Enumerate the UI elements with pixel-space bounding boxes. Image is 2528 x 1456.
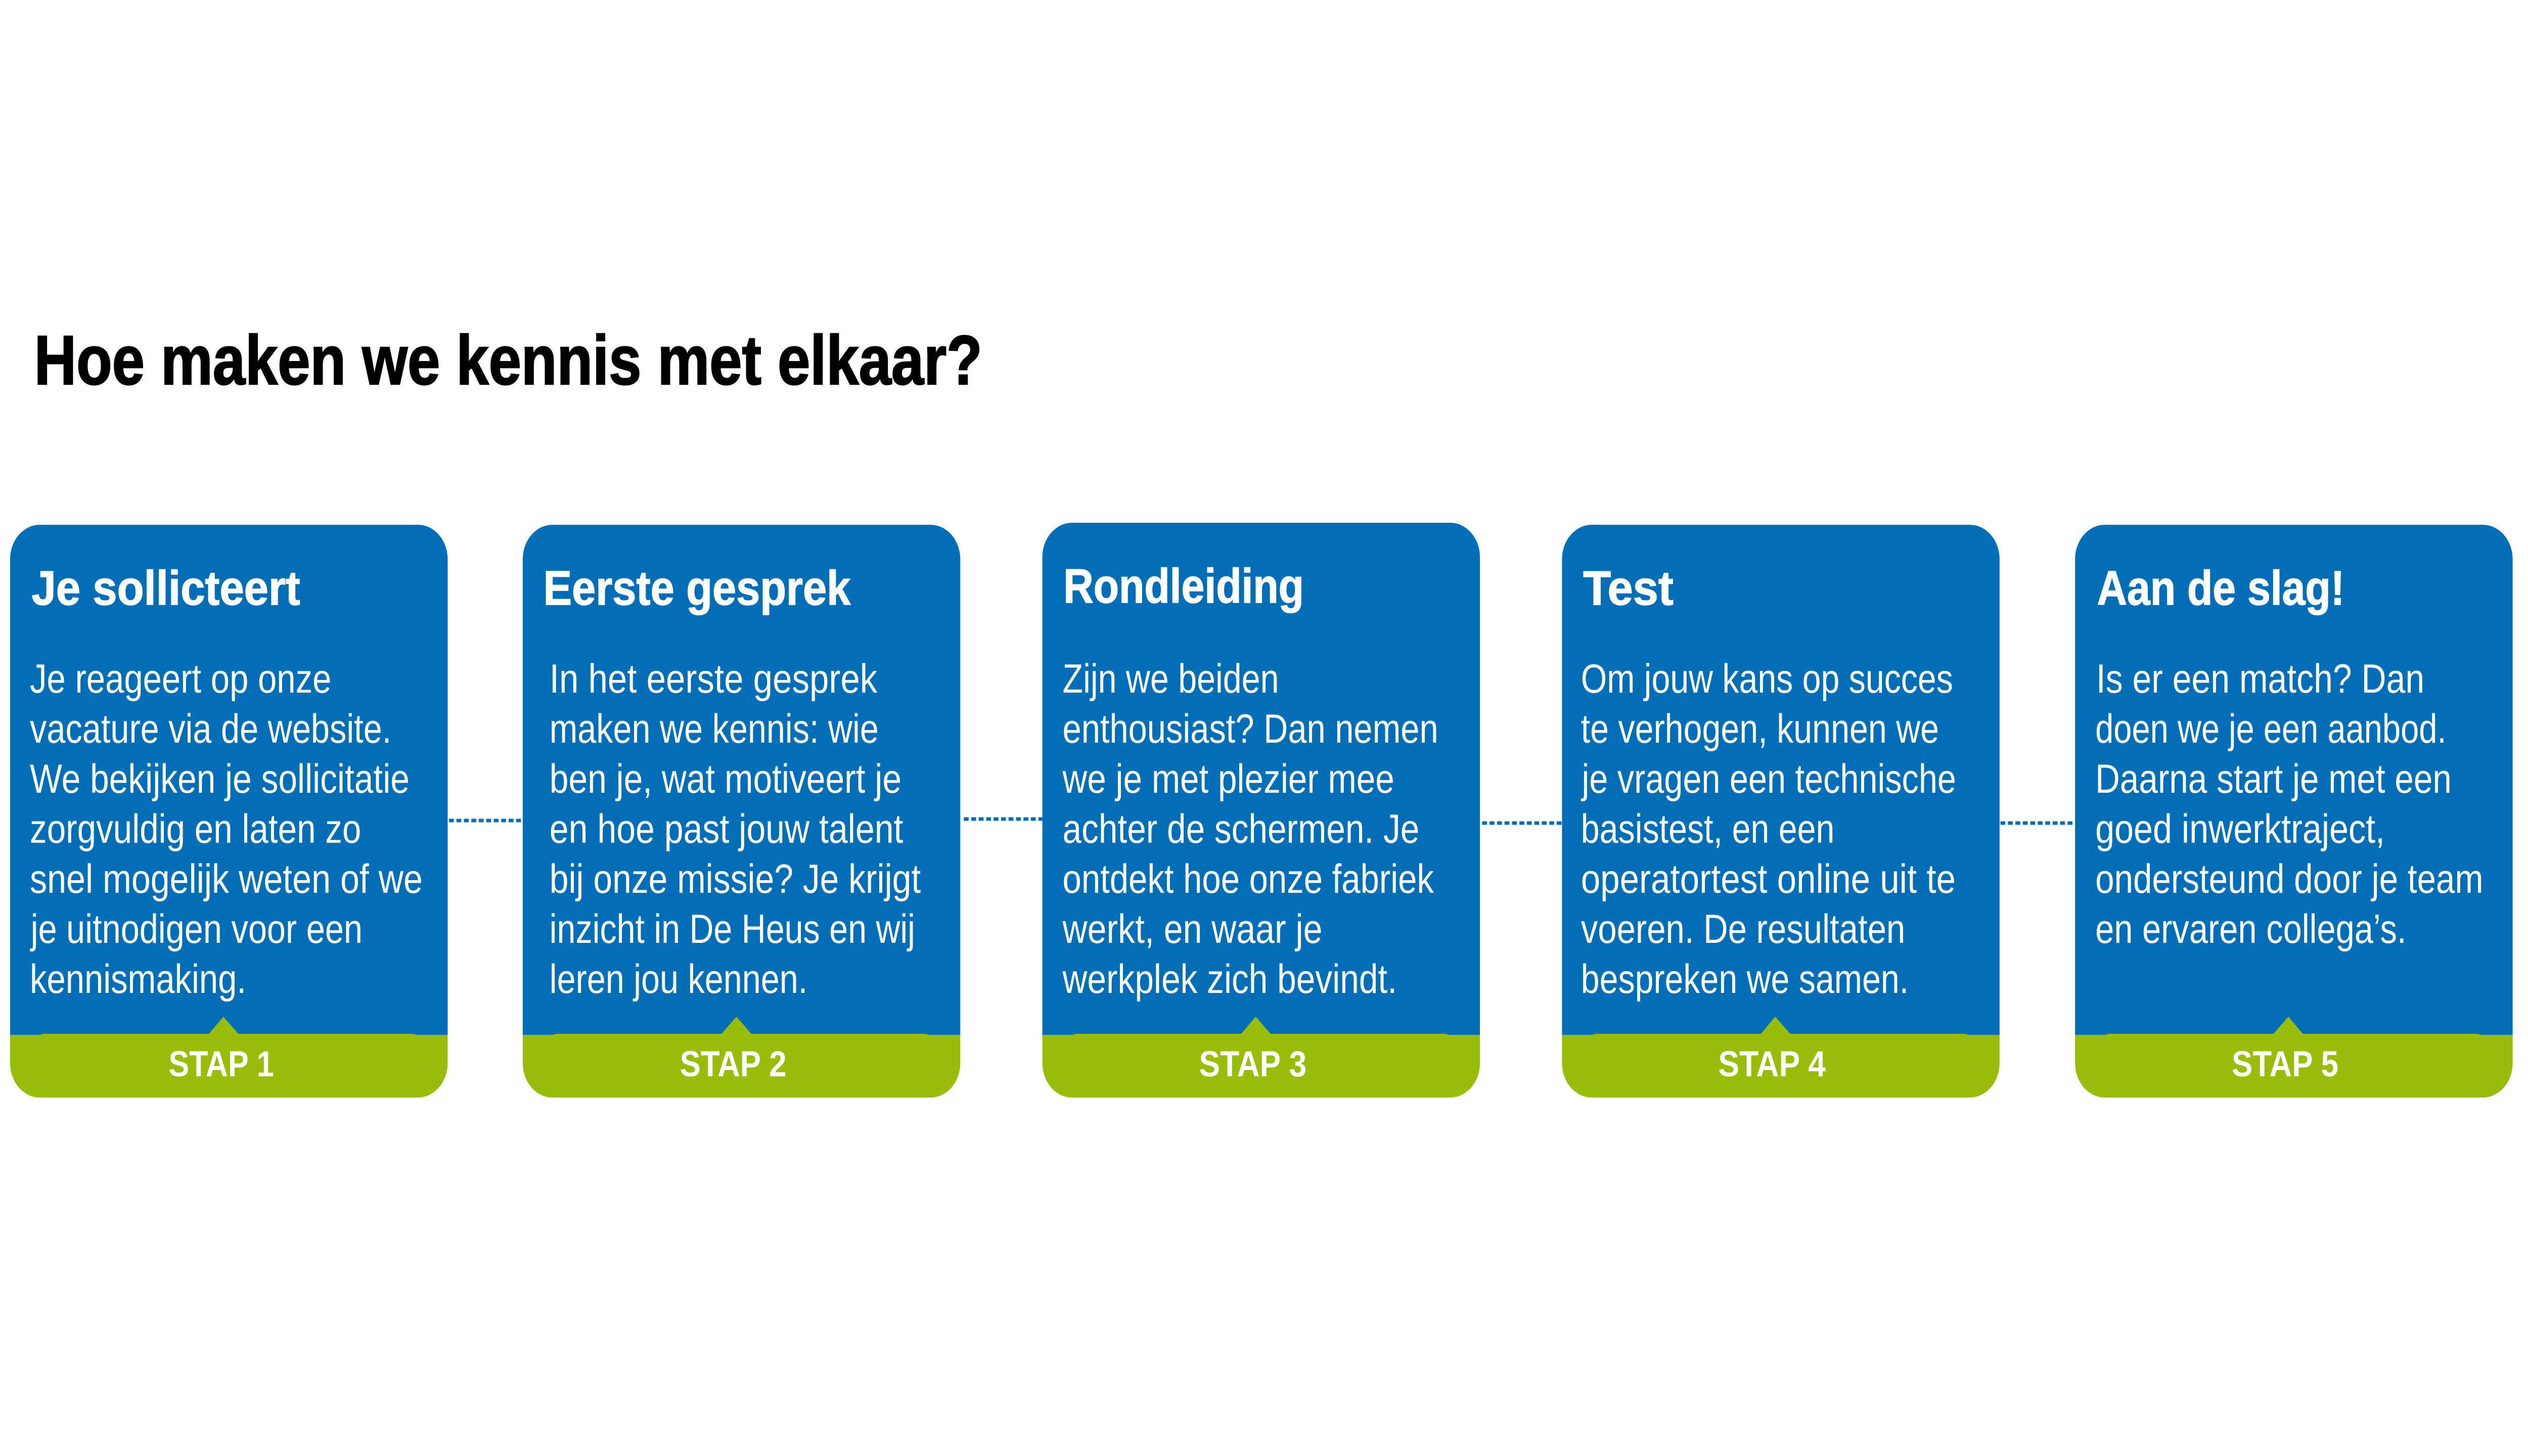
connector: step 2 to step 3	[964, 817, 1043, 821]
step label: STAP 5	[2232, 1044, 2338, 1084]
body text: voeren. De resultaten	[1581, 906, 1905, 952]
body text: vacature via de website.	[30, 706, 391, 752]
title: Hoe maken we kennis met elkaar?	[34, 322, 982, 399]
step label: STAP 4	[1718, 1044, 1826, 1084]
step label: STAP 3	[1199, 1044, 1306, 1084]
body text: en ervaren collega’s.	[2095, 906, 2407, 952]
step label: STAP 1	[168, 1044, 274, 1084]
body text: basistest, en een	[1581, 806, 1834, 852]
body text: ontdekt hoe onze fabriek	[1063, 856, 1434, 902]
body text: Daarna start je met een	[2095, 756, 2452, 802]
body text: ben je, wat motiveert je	[550, 756, 901, 802]
body text	[2095, 656, 2483, 952]
body text: Om jouw kans op succes	[1581, 656, 1953, 702]
body text: In het eerste gesprek	[550, 656, 878, 702]
connector: step 1 to step 2	[449, 819, 523, 822]
panel: step 3	[1043, 523, 1480, 1098]
panel: step 4	[1562, 525, 2000, 1098]
heading: Aan de slag!	[2097, 562, 2344, 615]
body text: bij onze missie? Je krijgt	[550, 856, 921, 902]
body text: leren jou kennen.	[550, 956, 807, 1002]
body text: snel mogelijk weten of we	[30, 856, 423, 902]
body text	[1581, 656, 1956, 1002]
body text: kennismaking.	[30, 956, 246, 1002]
step label: STAP 2	[680, 1044, 787, 1084]
heading: Rondleiding	[1063, 560, 1304, 613]
body text: Is er een match? Dan	[2096, 656, 2424, 702]
panel: step 1	[10, 525, 447, 1098]
body text: We bekijken je sollicitatie	[30, 756, 410, 802]
heading: Test	[1583, 562, 1674, 615]
body text: ondersteund door je team	[2095, 856, 2483, 902]
body text: Zijn we beiden	[1063, 656, 1279, 702]
body text: goed inwerktraject,	[2095, 806, 2385, 852]
body text: enthousiast? Dan nemen	[1063, 706, 1438, 752]
body text: we je met plezier mee	[1062, 756, 1394, 802]
connector: step 3 to step 4	[1482, 821, 1562, 825]
body text: operatortest online uit te	[1581, 856, 1956, 902]
body text: doen we je een aanbod.	[2095, 706, 2447, 752]
body text	[30, 656, 423, 1002]
panel: step 2	[523, 525, 960, 1098]
body text: je uitnodigen voor een	[30, 906, 363, 952]
body text	[550, 656, 921, 1002]
body text: Je reageert op onze	[30, 656, 331, 702]
body text: zorgvuldig en laten zo	[30, 806, 361, 852]
connector: step 4 to step 5	[2001, 821, 2075, 825]
body text: inzicht in De Heus en wij	[550, 906, 915, 952]
body text: maken we kennis: wie	[550, 706, 879, 752]
body text	[1062, 656, 1438, 1002]
body text: werkt, en waar je	[1062, 906, 1322, 952]
panel: step 5	[2075, 525, 2513, 1098]
body text: je vragen een technische	[1581, 756, 1956, 802]
body text: te verhogen, kunnen we	[1581, 706, 1939, 752]
heading: Je sollicteert	[31, 562, 300, 615]
body text: werkplek zich bevindt.	[1062, 956, 1397, 1002]
body text: bespreken we samen.	[1581, 956, 1909, 1002]
body text: achter de schermen. Je	[1063, 806, 1419, 852]
body text: en hoe past jouw talent	[550, 806, 903, 852]
heading: Eerste gesprek	[544, 562, 851, 615]
